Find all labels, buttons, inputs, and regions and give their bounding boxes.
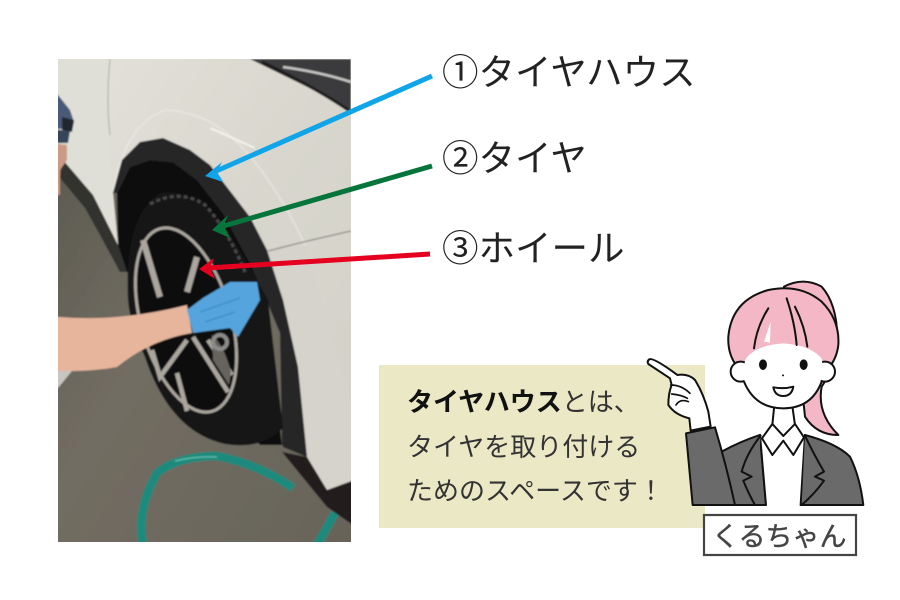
fender flare shading xyxy=(113,110,305,245)
explanation callout xyxy=(379,365,705,528)
face xyxy=(744,343,823,408)
name tag: くるちゃん xyxy=(712,522,846,552)
neck xyxy=(772,405,795,437)
label: tire house: ①タイヤハウス xyxy=(442,52,696,93)
car body panel xyxy=(107,59,351,490)
tyre xyxy=(128,192,283,445)
sleeve xyxy=(686,427,735,505)
eyes xyxy=(759,359,767,370)
person arm xyxy=(50,305,192,371)
arrow: red to wheel xyxy=(199,254,430,279)
lapels xyxy=(742,436,824,505)
wheel arch trim xyxy=(113,138,307,457)
mouth xyxy=(773,387,793,396)
explanation callout: ためのスペースです！ xyxy=(407,476,664,506)
collar xyxy=(762,424,804,455)
fringe strands xyxy=(754,298,807,348)
shirt xyxy=(760,435,805,505)
blue glove xyxy=(187,282,260,337)
window trim xyxy=(250,59,351,110)
label: tire: ②タイヤ xyxy=(442,138,587,179)
arrow: green to tyre xyxy=(212,166,432,238)
arrow: blue to wheel house xyxy=(205,76,432,182)
side sill xyxy=(60,160,127,272)
explanation callout: タイヤを取り付ける xyxy=(407,432,640,462)
explanation callout: タイヤハウスとは、 xyxy=(407,387,640,417)
lower sill xyxy=(282,452,351,524)
ears xyxy=(731,362,751,382)
name tag xyxy=(704,515,856,555)
character: Kuru-chan xyxy=(648,282,863,505)
ponytail xyxy=(784,282,838,435)
nose xyxy=(782,374,784,376)
wheel arch dark interior xyxy=(117,160,282,445)
label: wheel: ③ホイール xyxy=(442,228,624,269)
photo: car wheel being washed xyxy=(50,50,360,550)
green hose xyxy=(141,456,335,545)
person head at left edge xyxy=(58,94,74,130)
jacket body xyxy=(693,435,863,505)
pointing hand xyxy=(648,359,711,431)
hair back xyxy=(728,288,838,370)
rim xyxy=(132,225,240,415)
